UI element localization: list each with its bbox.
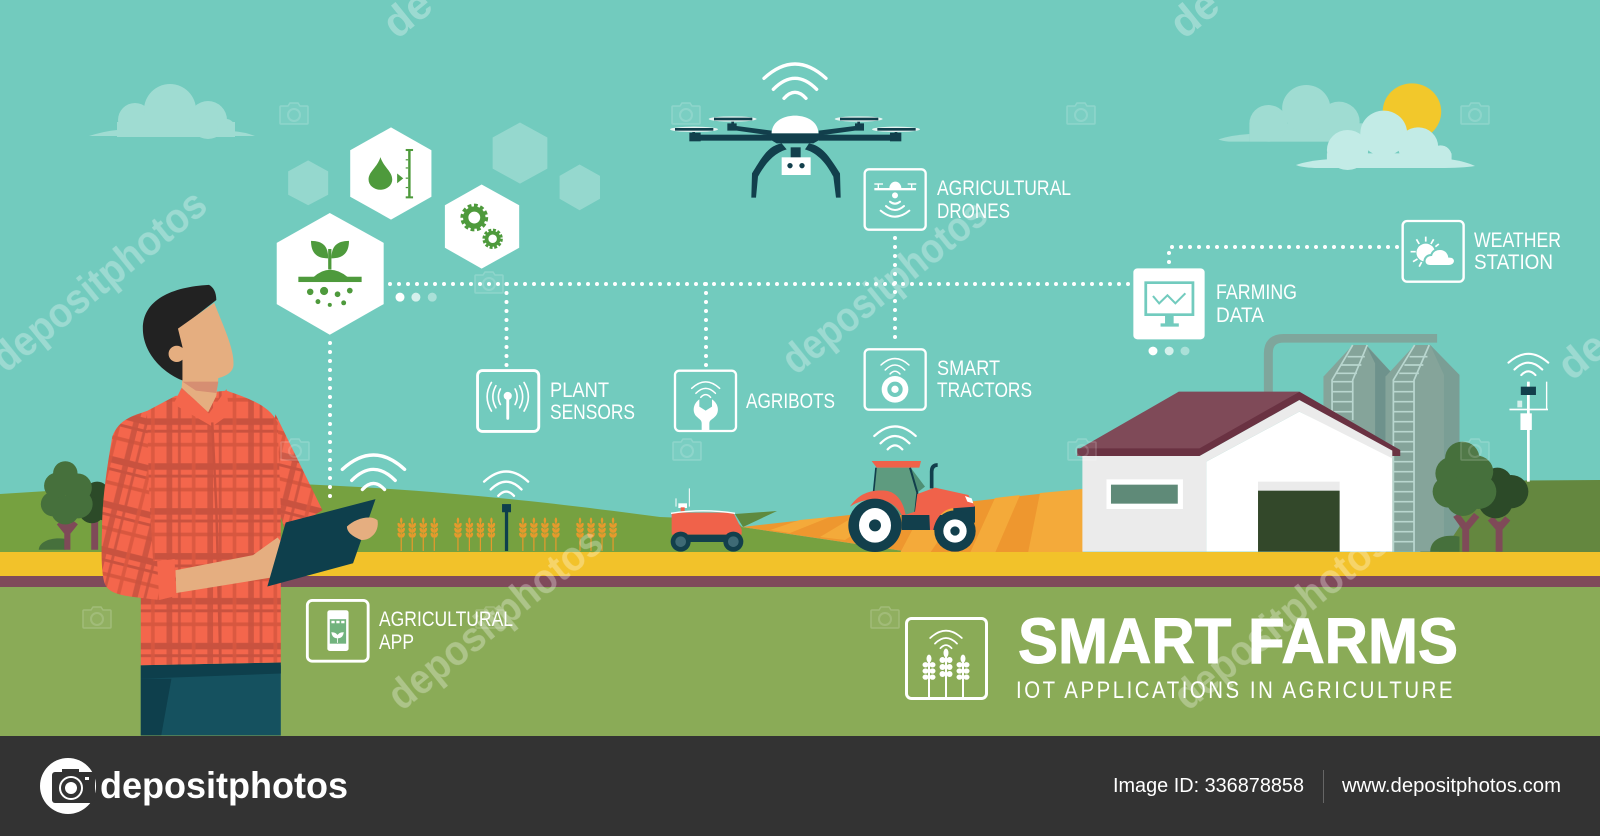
label: farming data: FARMING <box>1216 281 1297 304</box>
label: agricultural app <box>379 608 513 654</box>
label: agricultural app: APP <box>379 631 414 654</box>
forearm <box>176 538 288 593</box>
drone <box>670 64 920 198</box>
silos <box>1323 345 1459 552</box>
collar <box>173 388 229 427</box>
watermarks: depositphotos <box>772 189 996 383</box>
hill: right dark green <box>1420 480 1600 553</box>
website: www.depositphotos.com <box>1341 775 1561 797</box>
trousers <box>141 662 281 736</box>
label: weather station: STATION <box>1474 251 1553 274</box>
label: farming data: DATA <box>1216 304 1264 327</box>
title icon: wheat and wifi <box>906 618 986 698</box>
cloud: right rear <box>1218 85 1363 142</box>
cloud: right front <box>1296 111 1475 170</box>
shirt placket <box>212 422 220 662</box>
label: smart tractors <box>937 357 1032 402</box>
hexagon: water level <box>350 127 431 220</box>
neck <box>182 378 218 412</box>
icon box: agribots <box>675 371 736 431</box>
pagination dots <box>396 293 437 302</box>
wifi and sensors, wheat and man group <box>39 122 618 736</box>
hill: left green <box>0 484 917 553</box>
hand on tablet <box>347 517 378 540</box>
hair <box>143 285 216 381</box>
label: weather station <box>1474 229 1561 274</box>
icon box: weather station <box>1403 221 1464 282</box>
near sleeve <box>102 411 176 600</box>
label: plant sensors: PLANT <box>550 379 609 402</box>
label: farming data <box>1216 281 1297 327</box>
tractor wifi <box>874 426 916 449</box>
icon box: smart tractors <box>865 349 926 410</box>
watermarks: depositphotos <box>378 518 611 719</box>
trees right <box>1430 442 1528 552</box>
faint hexagons <box>288 122 600 210</box>
watermark camera icons <box>83 103 1489 628</box>
label: agricultural drones: DRONES <box>937 200 1010 223</box>
icon box: agricultural app <box>307 600 368 661</box>
label: plant sensors <box>550 379 635 424</box>
label: smart tractors: TRACTORS <box>937 379 1032 402</box>
cloud: left <box>89 84 255 139</box>
label: smart tractors: SMART <box>937 357 1000 380</box>
footer divider <box>1323 770 1324 803</box>
icon box: plant sensors <box>478 371 539 431</box>
ear <box>169 346 185 362</box>
wheat rows <box>397 518 618 551</box>
lower green ground <box>0 587 1600 736</box>
dots under farming data <box>1149 347 1189 355</box>
shirt <box>141 391 281 665</box>
footer bar <box>0 736 1600 836</box>
tablet <box>267 499 376 587</box>
sun <box>1383 83 1441 140</box>
yellow road band <box>0 552 1600 576</box>
footer logo <box>40 758 348 814</box>
drone, tractor, robot group <box>670 64 976 552</box>
title: SMART FARMS <box>1018 605 1458 677</box>
trees left <box>39 461 114 550</box>
sky background <box>0 0 1600 553</box>
label: agribots: AGRIBOTS <box>746 390 835 413</box>
tablet wifi <box>342 455 405 489</box>
footer logo: depositphotos <box>100 765 348 806</box>
robot <box>671 488 743 552</box>
barn <box>1077 392 1400 552</box>
farmer <box>102 285 378 736</box>
face <box>178 303 234 382</box>
subtitle: IOT APPLICATIONS IN AGRICULTURE <box>1016 677 1455 704</box>
silo pipe <box>1268 338 1437 393</box>
dotted connection lines <box>330 238 1397 503</box>
purple band <box>0 576 1600 587</box>
icon box: agricultural drones <box>865 169 926 230</box>
farm and right side group <box>1077 83 1548 552</box>
sleeve cuff <box>157 559 176 600</box>
label: agricultural app: AGRICULTURAL <box>379 608 513 631</box>
label: plant sensors: SENSORS <box>550 401 635 424</box>
field: ploughed orange <box>735 489 1083 553</box>
far sleeve <box>265 414 322 533</box>
icon box: farming data <box>1133 268 1205 339</box>
label: agricultural drones: AGRICULTURAL <box>937 177 1071 200</box>
neck shadow <box>182 382 218 393</box>
watermarks: depositphotos <box>1164 518 1397 719</box>
hexagon: gears <box>445 184 519 269</box>
image id: Image ID: 336878858 <box>1113 775 1304 797</box>
tractor <box>848 461 976 552</box>
weather station <box>1509 354 1548 482</box>
label: weather station: WEATHER <box>1474 229 1561 252</box>
hexagon: soil plant <box>277 213 384 335</box>
label: agricultural drones <box>937 177 1071 223</box>
plant sensor pole with wifi <box>484 471 528 551</box>
